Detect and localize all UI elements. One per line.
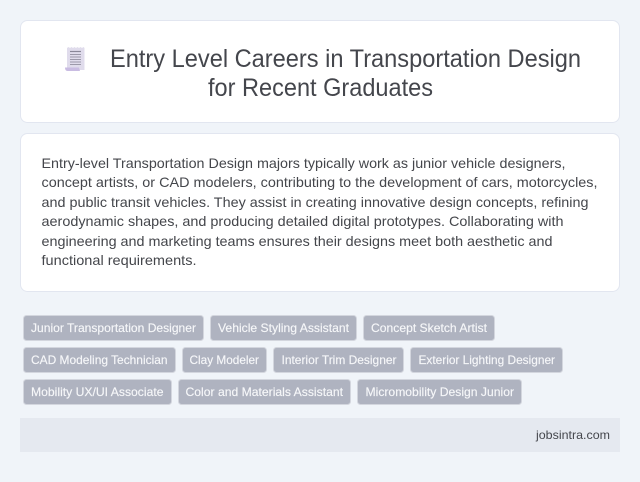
tag: Concept Sketch Artist: Concept Sketch Artist xyxy=(371,321,488,335)
tag: CAD Modeling Technician: CAD Modeling Technician xyxy=(31,353,168,367)
text block: description: concept artists, or CAD modelers, contributing to the development of cars, motorcycles, xyxy=(42,174,598,190)
tag: Clay Modeler: Clay Modeler xyxy=(190,353,259,367)
tag: CAD Modeling Technician xyxy=(24,348,176,372)
title xyxy=(110,45,581,102)
tag: Exterior Lighting Designer: Exterior Lighting Designer xyxy=(418,353,555,367)
tag: Color and Materials Assistant: Color and Materials Assistant xyxy=(186,385,344,399)
panel: description card xyxy=(20,134,620,292)
text block: description: aerodynamic shapes, and producing detailed digital prototypes. Collaborating with xyxy=(42,213,564,229)
tag: Concept Sketch Artist xyxy=(364,316,494,340)
tag: Vehicle Styling Assistant xyxy=(210,316,356,340)
tag list: career titles xyxy=(24,316,562,404)
tag: Interior Trim Designer xyxy=(274,348,404,372)
tag: Junior Transportation Designer: Junior Transportation Designer xyxy=(31,321,196,335)
text block: description: functional requirements. xyxy=(42,252,196,268)
footer bar xyxy=(20,418,620,452)
title: Entry Level Careers in Transportation Design xyxy=(110,45,581,73)
tag: Clay Modeler xyxy=(182,348,266,372)
text block: description: and public transit vehicles. They assist in creating innovative design concepts, refining xyxy=(42,194,588,210)
tag: Vehicle Styling Assistant: Vehicle Styling Assistant xyxy=(218,321,350,335)
tag: Mobility UX/UI Associate: Mobility UX/UI Associate xyxy=(31,385,164,399)
tag: Exterior Lighting Designer xyxy=(410,348,562,372)
tag: Junior Transportation Designer xyxy=(24,316,204,340)
text block: description: engineering and marketing teams ensures their designs meet both aesthetic and xyxy=(42,233,552,249)
footer text: source: jobsintra.com xyxy=(535,428,610,442)
tag: Color and Materials Assistant xyxy=(178,380,350,404)
title: for Recent Graduates xyxy=(208,74,433,102)
tag: Micromobility Design Junior: Micromobility Design Junior xyxy=(366,385,514,399)
text block: description: Entry-level Transportation Design majors typically work as junior vehicle designers, xyxy=(42,155,566,171)
text block: description xyxy=(42,155,598,268)
panel: header card xyxy=(20,20,620,122)
tag: Interior Trim Designer: Interior Trim Designer xyxy=(282,353,396,367)
tag: Mobility UX/UI Associate xyxy=(24,380,172,404)
icon: document scroll xyxy=(65,47,84,71)
tag: Micromobility Design Junior xyxy=(358,380,522,404)
